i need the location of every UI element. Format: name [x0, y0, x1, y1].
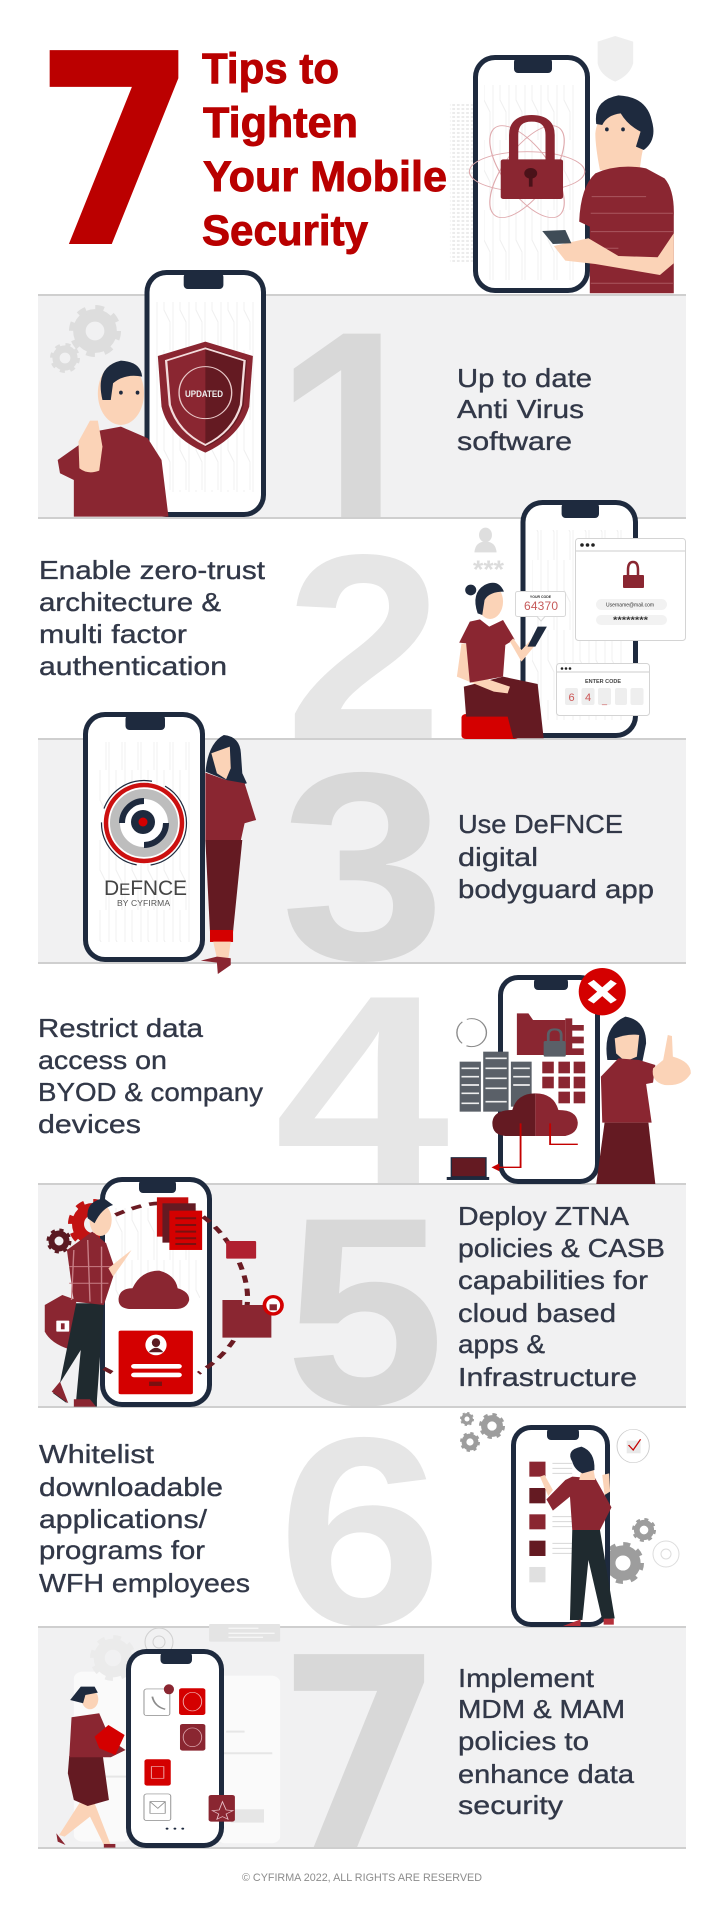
step 3 text: digital [458, 842, 538, 872]
step 6 text [39, 1439, 250, 1598]
big number 5: 5 [285, 1161, 445, 1461]
step 5 text: apps & [458, 1329, 545, 1359]
DeFNCE wordmark: DEFNCE [104, 877, 187, 900]
step 5 text: Infrastructure [458, 1362, 637, 1392]
big red numeral 7: 7 [34, 0, 197, 307]
step 7 text: policies to [458, 1726, 589, 1756]
step 3 text: bodyguard app [458, 874, 654, 904]
title: Tighten [203, 99, 358, 147]
step 1 text: Anti Virus [457, 394, 584, 424]
icon: updated shield [158, 342, 253, 453]
band 1 background [38, 295, 686, 518]
step 6 text: applications/ [39, 1504, 208, 1534]
title: Your Mobile [203, 153, 447, 201]
phone [83, 712, 205, 962]
step 5 text [458, 1201, 665, 1392]
band 5 background [38, 1184, 686, 1407]
illustration: woman seated with login windows: *** [473, 556, 504, 584]
phone [100, 1177, 212, 1407]
step 7 text: enhance data [458, 1759, 635, 1789]
step 5 text: policies & CASB [458, 1233, 665, 1263]
enter code window: ENTER CODE [585, 679, 621, 685]
step 1 text: Up to date [457, 363, 592, 393]
step 7 text: MDM & MAM [458, 1694, 625, 1724]
app icons [144, 1684, 235, 1830]
phone [511, 1425, 610, 1627]
band 7 background [38, 1627, 686, 1848]
illustration: hero man with phone and padlock [450, 36, 674, 293]
icon: gears [52, 309, 117, 371]
step 2 text: authentication [39, 651, 227, 681]
big number 4: 4 [274, 940, 451, 1242]
illustration: man with cloud apps and dashed ring [45, 1177, 284, 1407]
DeFNCE wordmark: BY CYFIRMA [117, 898, 170, 908]
panel content [52, 1197, 284, 1407]
title: Security [202, 207, 368, 255]
step 4 text: devices [38, 1109, 141, 1139]
band 3 background [38, 739, 686, 963]
step 4 text: access on [38, 1045, 167, 1075]
title [202, 45, 447, 255]
login window: ******** [613, 615, 649, 625]
code bubble: 64370 [524, 599, 558, 613]
step 2 text [39, 555, 266, 681]
enter code window [556, 664, 650, 716]
enter code window: 4 [585, 692, 591, 704]
step 5 text: Deploy ZTNA [458, 1201, 630, 1231]
step 3 text: Use DeFNCE [458, 809, 623, 839]
footer copyright: © CYFIRMA 2022, ALL RIGHTS ARE RESERVED [242, 1872, 482, 1884]
panel content [447, 1013, 691, 1184]
login window: Username@mail.com [606, 602, 654, 608]
enter code window: 6 [568, 692, 575, 704]
panel content [529, 1429, 649, 1626]
login window [576, 538, 686, 640]
phone [144, 270, 266, 517]
step 7 text [458, 1663, 635, 1820]
step 5 text: cloud based [458, 1298, 616, 1328]
illustration: woman seated with login windows [457, 500, 686, 739]
code bubble [516, 592, 566, 621]
big number 6: 6 [278, 1381, 442, 1681]
woman [201, 735, 256, 974]
step 4 text [38, 1013, 263, 1139]
woman [56, 1687, 126, 1848]
illustration: woman restricting data access with cloud and servers [447, 968, 691, 1184]
icon: updated shield: UPDATED [185, 389, 223, 400]
step 6 text: WFH employees [39, 1568, 250, 1598]
step 7 text: security [458, 1790, 563, 1820]
big number 7: 7 [278, 1601, 443, 1911]
step 6 text: downloadable [39, 1472, 223, 1502]
man [58, 361, 168, 517]
step 3 text [458, 809, 654, 904]
title: Tips to [202, 45, 339, 93]
code bubble: YOUR CODE [530, 595, 552, 599]
icon: gears and shield [45, 1202, 114, 1349]
step 2 text: multi factor [39, 619, 187, 649]
step 1 text [457, 363, 592, 456]
step 6 text: Whitelist [39, 1439, 155, 1469]
big number 2: 2 [285, 500, 443, 796]
icon: DeFNCE logo [102, 780, 186, 866]
enter code window: _ [601, 695, 608, 705]
illustration: man tapping list items on phone [461, 1413, 679, 1627]
faded background screens [74, 1624, 280, 1843]
step 2 text: Enable zero-trust [39, 555, 266, 585]
illustration: woman with app phone [56, 1624, 280, 1848]
phone [520, 500, 638, 738]
illustration: man with thumbs up and updated shield [52, 270, 266, 517]
icon: red cross badge [579, 968, 626, 1015]
icon: gears [461, 1413, 654, 1581]
illustration: woman with DeFNCE app phone [83, 712, 256, 974]
step 7 text: Implement [458, 1663, 595, 1693]
step 2 text: architecture & [39, 587, 221, 617]
phone [498, 975, 600, 1184]
phone [126, 1649, 224, 1848]
big number 3: 3 [280, 716, 446, 1016]
step 4 text: Restrict data [38, 1013, 204, 1043]
step 1 text: software [457, 426, 572, 456]
step 4 text: BYOD & company [38, 1077, 263, 1107]
big number 1: 1 [274, 267, 434, 616]
step 6 text: programs for [39, 1535, 205, 1565]
woman seated [457, 583, 547, 739]
step 5 text: capabilities for [458, 1265, 648, 1295]
